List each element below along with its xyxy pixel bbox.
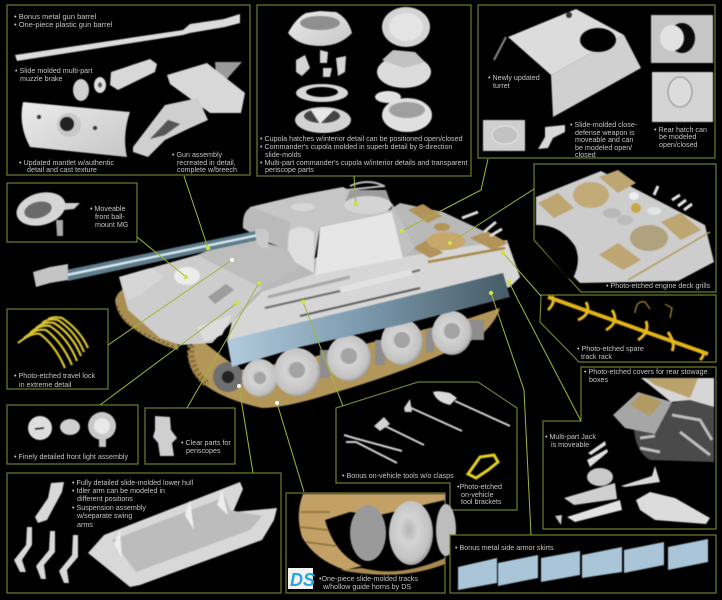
label: mount MG	[95, 221, 129, 229]
label: • Photo-etched spare	[577, 345, 644, 353]
exhaust pipes	[462, 212, 502, 236]
label: • Photo-etched engine deck grills	[606, 282, 711, 290]
idler arm	[35, 482, 64, 523]
label: front ball-	[95, 213, 125, 221]
grills	[538, 193, 574, 218]
engine deck	[536, 171, 714, 283]
stowage tubes	[265, 270, 420, 308]
front deck behind gun	[197, 236, 312, 292]
leader lines	[100, 159, 581, 535]
commander's cupola	[346, 182, 385, 190]
jack parts	[587, 441, 608, 467]
label: • Finely detailed front light assembly	[14, 453, 128, 461]
close-defense weapon inset	[483, 120, 525, 151]
labels: muzzle brake	[20, 75, 62, 83]
gun mantlet collar	[255, 229, 269, 248]
periscope part	[153, 416, 177, 456]
turret roof	[243, 187, 392, 273]
label: w/hollow guide horns by DS	[322, 583, 411, 591]
label: •One-piece slide-molded tracks	[319, 575, 418, 583]
labels: be modeled	[659, 133, 696, 141]
labels: defense weapon is	[575, 129, 635, 137]
labels: • Gun assembly	[172, 151, 223, 159]
panel: engine deck grills	[534, 164, 716, 292]
labels: closed	[575, 151, 596, 159]
label	[90, 205, 129, 229]
muzzle brake parts	[110, 59, 157, 90]
labels: • Newly updated	[488, 74, 540, 82]
glacis plate	[119, 255, 262, 345]
labels: • Multi-part commander's cupola w/interior details and transparent	[260, 159, 467, 167]
labels: • Suspension assembly	[72, 504, 146, 512]
labels: • Bonus metal gun barrel	[14, 12, 97, 21]
axe	[374, 417, 390, 431]
panel: turret	[478, 5, 715, 159]
rear hull	[634, 395, 714, 462]
turret	[243, 182, 415, 275]
labels: arms	[77, 521, 93, 529]
labels: boxes	[589, 376, 608, 384]
labels	[260, 135, 467, 174]
label: • Clear parts for	[181, 439, 231, 447]
labels: • Photo-etched covers for rear stowage	[584, 368, 708, 376]
label: • Moveable	[90, 205, 125, 213]
panel: ball-mount MG	[7, 183, 137, 242]
labels: periscope parts	[265, 166, 314, 174]
upper hull and engine deck	[227, 203, 520, 342]
panel: gun barrel and mantlet	[7, 5, 250, 175]
label: periscopes	[186, 447, 221, 455]
main tank	[33, 182, 520, 408]
engine deck grills	[408, 204, 442, 223]
breech assembly	[215, 62, 242, 80]
rear hatch insets	[651, 15, 713, 63]
labels: complete w/breech	[177, 166, 237, 174]
cupola parts	[288, 11, 352, 46]
labels	[14, 12, 237, 174]
hammer	[404, 399, 412, 412]
road wheels close-up	[350, 505, 386, 561]
turret roof part	[508, 9, 624, 75]
track: front	[115, 287, 178, 350]
skirt plates	[458, 539, 708, 590]
labels: turret	[493, 82, 510, 90]
turret side face	[315, 212, 403, 275]
swing arms	[14, 527, 32, 572]
labels: detail and cast texture	[27, 166, 97, 174]
turret cheek	[288, 227, 314, 273]
labels: • Multi-part Jack	[545, 433, 596, 441]
panel: lower hull	[7, 473, 281, 593]
labels: • Slide-molded close-	[570, 121, 638, 129]
hooks	[548, 296, 703, 360]
labels: on-vehicle	[461, 491, 494, 499]
panel: rear stowage and jack	[543, 367, 716, 529]
mantlet part	[22, 102, 130, 157]
labels	[72, 479, 194, 529]
cupola hole	[580, 28, 616, 52]
labels: • Slide molded multi-part	[15, 67, 93, 75]
shovel	[433, 391, 457, 405]
labels: • Cupola hatches w/interior detail can be positioned open/closed	[260, 135, 463, 143]
labels: recreated in detail,	[177, 159, 236, 167]
labels: • Fully detailed slide-molded lower hull	[72, 479, 194, 487]
labels: different positions	[77, 495, 133, 503]
label	[577, 345, 644, 361]
labels: open/closed	[659, 141, 698, 149]
label: track rack	[581, 353, 612, 361]
labels: moveable and can	[575, 136, 633, 144]
labels: • Rear hatch can	[654, 126, 707, 134]
DS logo: DS	[290, 570, 315, 590]
stowage box	[613, 392, 672, 434]
muzzle brake	[33, 264, 68, 287]
label	[181, 439, 231, 455]
labels: • One-piece plastic gun barrel	[14, 20, 113, 29]
panel: tools	[336, 382, 517, 510]
track close-up	[299, 494, 445, 570]
panel: spare track rack	[540, 295, 716, 362]
label: • Photo-etched travel lock	[14, 372, 96, 380]
light parts	[28, 416, 52, 440]
label	[319, 575, 418, 591]
panel: tracks	[286, 493, 456, 593]
tool brackets	[468, 455, 498, 478]
hull part	[88, 482, 277, 587]
travel lock part	[18, 317, 88, 368]
panel: travel lock	[7, 309, 108, 389]
panel: side armor skirts	[450, 535, 716, 593]
main gun barrel	[66, 231, 258, 281]
road wheels	[242, 311, 472, 397]
labels: tool brackets	[461, 498, 502, 506]
turret side part	[551, 35, 641, 117]
bulkheads	[114, 490, 228, 558]
panel: cupola	[257, 5, 471, 176]
labels: slide-molds	[265, 151, 302, 159]
labels: • Bonus on-vehicle tools w/o clasps	[342, 472, 454, 480]
panel: periscopes	[145, 408, 235, 464]
labels: be modeled open/	[575, 144, 632, 152]
gun barrel part	[15, 14, 240, 61]
labels	[342, 472, 502, 506]
rack	[548, 297, 708, 354]
icon: ball-mount MG	[13, 187, 69, 231]
labels	[545, 368, 708, 449]
labels: • Updated mantlet w/authentic	[19, 159, 114, 167]
track: lower run	[188, 308, 500, 408]
labels: • Idler arm can be modeled in	[72, 487, 165, 495]
bogies	[320, 320, 484, 378]
pliers	[344, 435, 402, 463]
labels: w/separate swing	[76, 512, 132, 520]
labels: • Commander's cupola molded in superb detail by 8-direction	[260, 143, 452, 151]
labels: is moveable	[551, 441, 589, 449]
label: • Bonus metal side armor skirts	[455, 544, 554, 552]
labels	[488, 74, 707, 159]
label: in extreme detail	[19, 381, 72, 389]
labels: •Photo-etched	[457, 483, 502, 491]
side armor skirts	[227, 273, 510, 367]
drive sprocket	[213, 362, 243, 392]
panel: front light	[7, 405, 138, 464]
label	[14, 372, 96, 389]
